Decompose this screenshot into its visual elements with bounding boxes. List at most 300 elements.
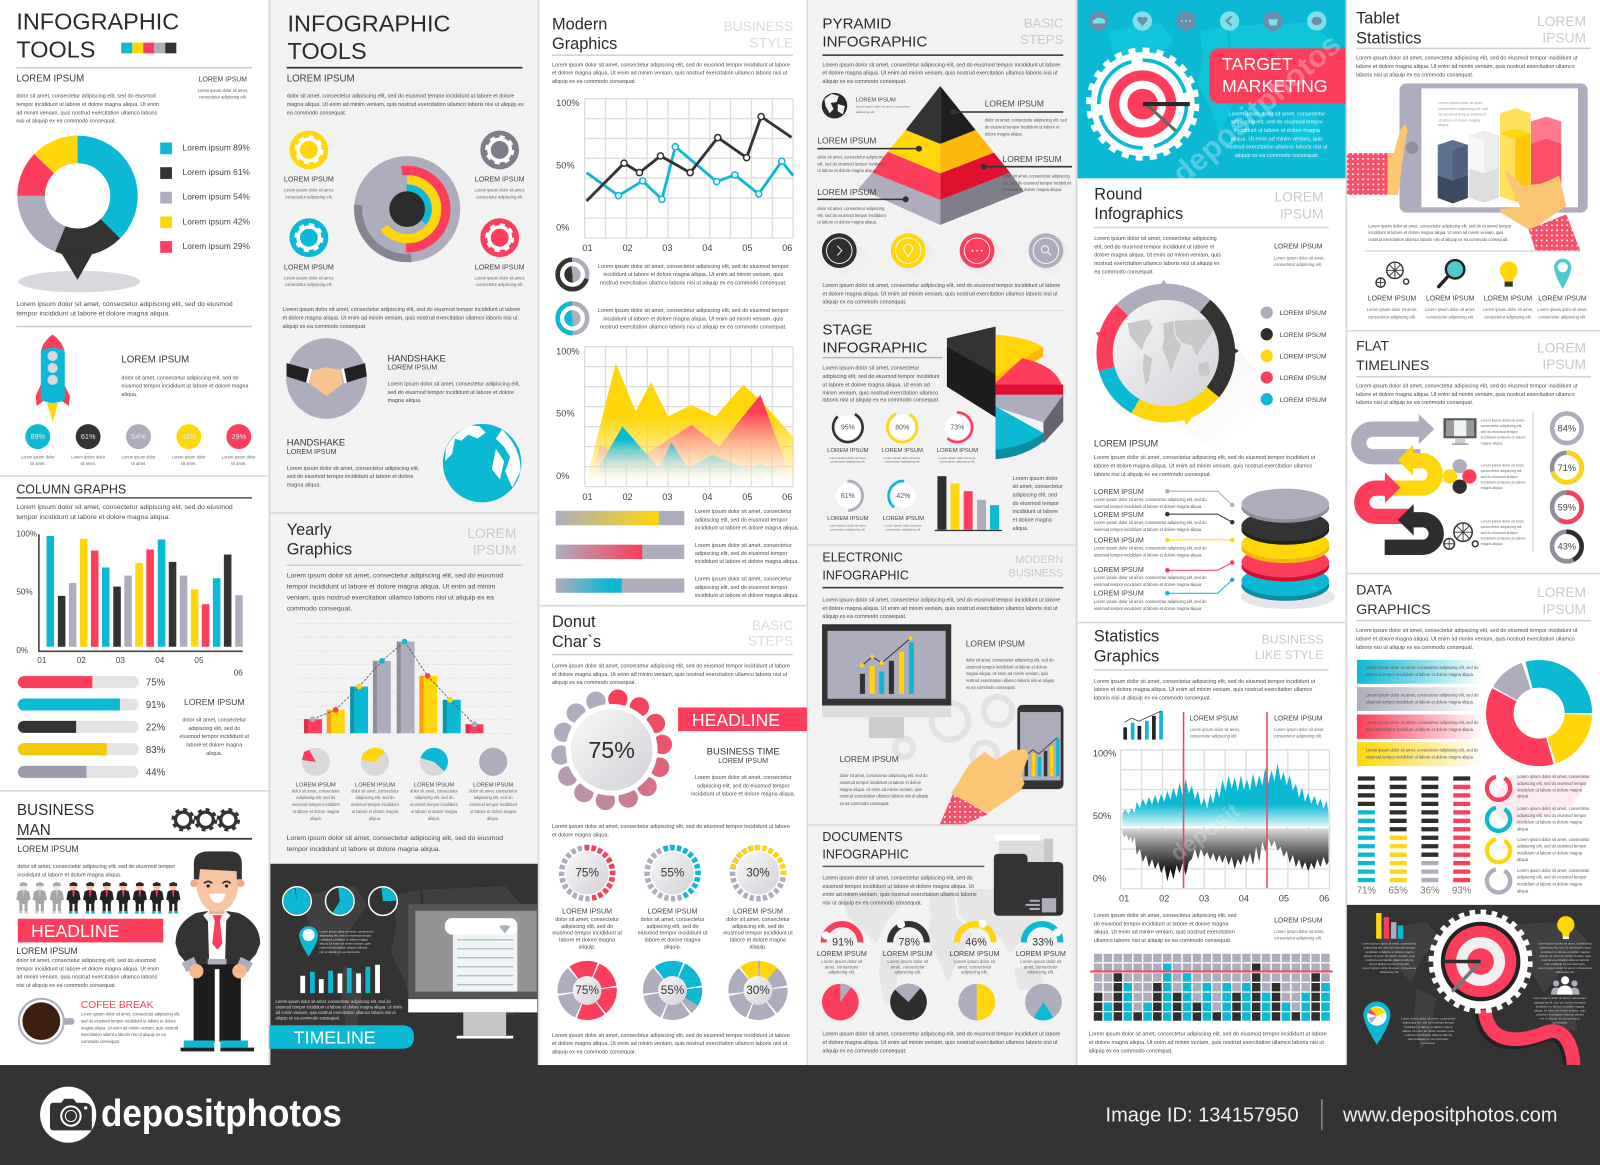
callout mid left: dolor sit amet, consectetur adipiscing bbox=[817, 154, 884, 159]
paragraph: aliquip ex ea commodo consequat. bbox=[552, 1049, 637, 1055]
text block: ad minim veniam, quis nostrud exercitation ullamco laboris bbox=[16, 975, 157, 981]
paragraph: et dolore magna aliqua. Ut enim ad minim veniam, quis nostrud exercitation ullamco laboris nisi ut bbox=[552, 1041, 788, 1047]
ring captions: adipiscing elit, sed do bbox=[732, 924, 784, 930]
paragraph: aliquip ex ea commodo consequat. bbox=[1089, 1048, 1173, 1054]
panel: dark target bbox=[1347, 905, 1600, 1068]
mini rings second row bbox=[833, 475, 924, 517]
ring captions: eiusmod tempor incididunt ut bbox=[638, 930, 708, 936]
mini rings first row bbox=[828, 407, 972, 447]
icon captions: LOREM IPSUM bbox=[1484, 296, 1532, 303]
paragraph: veniam, quis nostrud exercitation ullamco laboris nisi ut aliquip ex ea bbox=[287, 595, 494, 602]
paragraph: Lorem ipsum dolor sit amet, consectetur adipiscing elit, sed do eiusmod tempor incididunt ut bbox=[1356, 384, 1578, 390]
subheading: LOREM IPSUM bbox=[16, 73, 84, 84]
rocket caption: aliqua. bbox=[121, 392, 138, 398]
panel: electronic infographic bbox=[822, 551, 1063, 824]
dark panel text lower right: nostrud exercitation ullamco laboris bbox=[1536, 1013, 1584, 1017]
column chart: 02 bbox=[77, 656, 86, 665]
ring text: Lorem ipsum dolor sit amet, consectetur bbox=[1517, 806, 1590, 811]
business time text: incididunt ut labore et dolore magna aliqua. bbox=[691, 792, 796, 798]
side label: LOREM bbox=[1537, 14, 1586, 29]
dark panel text right: adipiscing elit, sed do eiusmod tempor bbox=[1539, 946, 1591, 950]
callout top right: dolore magna aliqua. bbox=[985, 131, 1023, 136]
mini ring captions: Lorem ipsum dolor sit amet, bbox=[883, 456, 921, 460]
paragraph: eiusmod tempor incididunt ut labore et dolore magna aliqua. Ut bbox=[822, 884, 974, 890]
heading: Tablet bbox=[1356, 9, 1400, 27]
ring text: aliqua. bbox=[1517, 826, 1529, 831]
second handshake text: sed do eiusmod tempor incididunt ut labore et dolore bbox=[287, 474, 413, 480]
column chart: 05 bbox=[194, 656, 204, 665]
bar descriptions: incididunt ut labore et dolore magna aliqua. bbox=[695, 559, 799, 565]
row text: Lorem ipsum dolor sit amet, consectetur adipiscing elit, sed do bbox=[1366, 720, 1479, 725]
waveform chart: 50% bbox=[1093, 811, 1111, 821]
gauge captions: LOREM IPSUM bbox=[883, 950, 933, 958]
red road bbox=[1482, 1010, 1573, 1068]
heading: Char`s bbox=[552, 633, 601, 651]
column chart: 0% bbox=[16, 646, 28, 655]
panel: target marketing bbox=[1078, 0, 1347, 191]
paragraph: et dolore magna aliqua. bbox=[552, 833, 609, 839]
watermark over target panel: depositphotos bbox=[1166, 27, 1347, 191]
bar descriptions: Lorem ipsum dolor sit amet, consectetur bbox=[695, 509, 792, 515]
mini rings second row: 42% bbox=[896, 493, 910, 500]
panel: modern graphics bbox=[552, 15, 799, 599]
target text: nostrud exercitation ullamco laboris nisi ut bbox=[1226, 145, 1328, 151]
icon captions: Lorem ipsum dolor sit amet, bbox=[1537, 307, 1588, 312]
ring text: Lorem ipsum dolor sit amet, consectetur bbox=[1517, 837, 1590, 842]
paragraph: Lorem ipsum dolor sit amet, consectetur adipiscing elit, sed do eiusmod tempor incididunt ut labore bbox=[552, 62, 790, 68]
heading: STAGE bbox=[822, 322, 873, 339]
heading: Graphics bbox=[552, 35, 617, 53]
pin text: Lorem ipsum dolor sit amet, consectetur bbox=[319, 929, 374, 933]
percentage circles: sit amet. bbox=[30, 461, 45, 466]
icon: coffee cup bbox=[18, 998, 74, 1045]
callout mid right bbox=[981, 154, 1072, 192]
petal dial 75% bbox=[551, 690, 672, 810]
second handshake text: Lorem ipsum dolor sit amet, consectetur adipiscing elit, bbox=[287, 466, 420, 472]
icon: map pin bbox=[1554, 259, 1571, 289]
pin text: adipiscing elit, sed do eiusmod tempor bbox=[319, 933, 371, 937]
dark panel text right: Lorem ipsum dolor sit amet, consectetur bbox=[1538, 966, 1592, 970]
column chart text: sit amet, consectetur bbox=[1013, 484, 1063, 490]
timeline text: sed do eiusmod tempor bbox=[1481, 475, 1519, 479]
background gears bbox=[895, 697, 1012, 767]
icon captions: consectetur adipiscing elit. bbox=[1484, 314, 1532, 319]
side note: dolor sit amet, consectetur bbox=[182, 718, 246, 724]
pie captions: aliqua. bbox=[369, 816, 381, 821]
panel: column graphs bbox=[16, 483, 252, 778]
mini ring captions: Lorem ipsum dolor sit amet, bbox=[939, 456, 976, 460]
percentage circles: Lorem ipsum dolor bbox=[172, 455, 206, 460]
area chart: 05 bbox=[742, 492, 752, 502]
ring captions: LOREM IPSUM bbox=[648, 908, 698, 916]
gear captions: Lorem ipsum dolor sit amet, bbox=[475, 187, 525, 192]
icon: rocket bbox=[36, 335, 70, 422]
side note: eiusmod tempor incididunt ut bbox=[180, 734, 250, 740]
column chart text: incididunt ut labore bbox=[1013, 509, 1058, 515]
legend: Lorem ipsum 61% bbox=[183, 167, 250, 177]
paragraph: Lorem ipsum dolor sit amet, consectetur adipiscing elit, sed do eiusmod tempor incididunt ut labore bbox=[822, 1032, 1060, 1038]
pie captions: aliqua. bbox=[428, 816, 440, 821]
dark panel text: ad minim veniam, quis nostrud exercitation ullamco laboris nisi ut bbox=[276, 1010, 396, 1015]
icon: three gears bbox=[173, 810, 239, 830]
illustration: tablet with 3D bars bbox=[1399, 83, 1588, 213]
paragraph: Lorem ipsum dolor sit amet, consectetur adipiscing elit, sed do eiusmod tempor incididunt ut labore bbox=[552, 1033, 790, 1039]
pie captions: eiusmod tempor incididunt bbox=[292, 802, 340, 807]
stripe columns bbox=[1366, 776, 1462, 882]
dark panel text right: aliqua. Ut enim ad minim veniam, quis bbox=[1539, 954, 1591, 958]
percentage circles: 29% bbox=[231, 432, 247, 441]
heading: GRAPHICS bbox=[1356, 602, 1431, 618]
tablet caption: incididunt ut labore et dolore magna aliqua. Ut enim ad minim veniam, quis bbox=[1368, 230, 1503, 235]
icon captions: LOREM IPSUM bbox=[1426, 296, 1475, 303]
icon: mini monitor bbox=[1443, 418, 1477, 445]
bar descriptions: incididunt ut labore et dolore magna aliqua. bbox=[695, 525, 799, 531]
pie captions: dolor sit amet, consectetur bbox=[292, 788, 340, 793]
button icons bbox=[822, 233, 1076, 286]
side note: labore et dolore magna bbox=[186, 743, 243, 749]
ring captions: adipiscing elit, sed do bbox=[647, 924, 699, 930]
people row bbox=[16, 882, 180, 914]
column chart: 100% bbox=[16, 530, 37, 539]
dark panel text right: incididunt ut labore et dolore magna bbox=[1541, 950, 1590, 954]
monitor text: eiusmod tempor incididunt ut labore et dolore bbox=[966, 664, 1048, 669]
legend bbox=[160, 142, 250, 253]
annotation text: Lorem ipsum dolor sit amet, bbox=[1274, 727, 1324, 732]
gear captions: LOREM IPSUM bbox=[284, 176, 334, 184]
stack list: eiusmod tempor incididunt ut labore et dolore magna aliqua. bbox=[1094, 582, 1202, 587]
side note: Lorem ipsum dolor sit amet, bbox=[1274, 929, 1324, 934]
illustration: tablet with 3D bars: do eiusmod tempor incididunt bbox=[1438, 113, 1486, 117]
side note: LOREM IPSUM bbox=[184, 697, 245, 707]
stack list: eiusmod tempor incididunt ut labore et dolore magna aliqua. bbox=[1094, 527, 1202, 532]
cyan ring bbox=[558, 303, 587, 333]
illustration: monitor with document bbox=[408, 904, 537, 1039]
gauge captions: amet, consectetur bbox=[825, 964, 859, 969]
icon: yellow bulb bbox=[1557, 916, 1574, 939]
icon: gears bbox=[1444, 523, 1478, 549]
round ring chart bbox=[1096, 280, 1276, 449]
semi gauges: 91% bbox=[832, 936, 854, 948]
small pies bbox=[302, 748, 507, 776]
column chart: 50% bbox=[16, 588, 33, 597]
icon captions: consectetur adipiscing elit. bbox=[1368, 314, 1416, 319]
dark panel text right: Lorem ipsum dolor sit amet, consectetur bbox=[1538, 942, 1592, 946]
illustration: pointing hand bbox=[940, 750, 1029, 824]
panel: infographic tools, gears and handshake bbox=[282, 11, 525, 502]
paragraph: laboris nisi ut aliquip ex ea commodo consequat. bbox=[1094, 696, 1212, 702]
ring text: nostrud exercitation ullamco laboris nisi ut aliquip ex ea commodo consequat. bbox=[600, 324, 787, 330]
paragraph: tempor incididunt ut labore et dolore magna aliqua. bbox=[16, 514, 170, 521]
handshake text: sed do eiusmod tempor incididunt ut labore et dolore bbox=[387, 390, 514, 396]
mini rings second row: 61% bbox=[841, 493, 855, 500]
pie captions: aliqua. bbox=[310, 816, 322, 821]
stack list: Lorem ipsum dolor sit amet, consectetur adipiscing elit, sed do bbox=[1094, 497, 1207, 502]
paragraph: aliquip ex ea commodo consequat. bbox=[822, 79, 907, 85]
image id: Image ID: 134157950 bbox=[1106, 1104, 1299, 1126]
dark panel text lower right: adipiscing elit, sed do eiusmod tempor bbox=[1534, 1000, 1586, 1004]
illustration: tablet with 3D bars: consectetur adipiscing elit, sed bbox=[1438, 107, 1488, 111]
globe caption: adipiscing elit. bbox=[856, 110, 875, 114]
paragraph: aliquip ex ea commodo consequat. bbox=[282, 324, 367, 330]
paragraph: tempor incididunt ut labore et dolore magna aliqua. bbox=[16, 311, 170, 318]
waveform chart: 04 bbox=[1239, 893, 1249, 903]
illustration: right hand pointing bbox=[1500, 171, 1580, 251]
percentage circles: sit amet. bbox=[231, 461, 246, 466]
ring legend: LOREM IPSUM bbox=[1280, 332, 1327, 339]
text block: Lorem ipsum dolor sit amet, consectetur adipiscing elit, sed do eiusmod tempor incididunt ut bbox=[1094, 455, 1316, 461]
side note: Lorem ipsum dolor sit amet, bbox=[1274, 255, 1324, 260]
column chart text: Lorem ipsum dolor bbox=[1013, 476, 1058, 482]
pie captions: eiusmod tempor incididunt bbox=[351, 802, 400, 807]
illustration: tablet with 3D bars: Lorem ipsum dolor sit amet, bbox=[1438, 101, 1483, 105]
dashed ring 55%: 55% bbox=[661, 866, 684, 879]
pie captions: ut labore et dolore magna bbox=[352, 809, 399, 814]
mini ring captions: LOREM IPSUM bbox=[827, 448, 869, 454]
paragraph: Lorem ipsum dolor sit amet, consectetur adipiscing elit, sed do eiusmod tempor incididunt ut labore bbox=[1089, 1032, 1327, 1038]
intro text: ea commodo consequat. bbox=[287, 110, 347, 116]
icon: mini growth chart bbox=[1123, 711, 1163, 740]
icon: grey gear bbox=[480, 131, 519, 169]
panel: round infographics bbox=[1094, 185, 1335, 611]
headline banner: HEADLINE bbox=[31, 921, 119, 941]
callout top right: dolor sit amet, consectetur adipiscing elit, sed bbox=[985, 117, 1067, 122]
pie captions: LOREM IPSUM bbox=[296, 783, 336, 789]
percentage circles: sit amet. bbox=[80, 461, 96, 466]
ring text: incididunt ut labore et dolore magna bbox=[1517, 820, 1583, 825]
dark panel text bottom: consequat. bbox=[1421, 1041, 1436, 1045]
paragraph: Lorem ipsum dolor sit amet, consectetur adipiscing elit, sed do eiusmod bbox=[16, 504, 233, 511]
panel: documents infographic bbox=[817, 830, 1066, 1054]
waveform chart bbox=[1093, 712, 1330, 903]
paragraph: Lorem ipsum dolor sit amet, consectetur adipiscing elit, sed do eiusmod tempor incididunt ut labore bbox=[822, 62, 1060, 68]
stack list: LOREM IPSUM bbox=[1094, 537, 1144, 545]
black ring bbox=[558, 260, 587, 289]
ring text: adipiscing elit, sed do eiusmod tempor bbox=[1517, 844, 1587, 849]
line chart: 50% bbox=[556, 160, 574, 170]
waveform chart: 100% bbox=[1093, 749, 1116, 759]
paragraph: Lorem ipsum dolor sit amet, consectetur adipiscing elit, sed do eiusmod tempor incididunt ut labore bbox=[282, 307, 520, 313]
gear captions: consectetur adipiscing elit. bbox=[476, 194, 524, 199]
column chart text: aliqua. bbox=[1013, 526, 1029, 532]
column chart: 01 bbox=[37, 656, 47, 665]
globe caption: Lorem ipsum dolor sit amet, consectetur bbox=[856, 105, 910, 109]
area chart: 06 bbox=[782, 492, 792, 502]
side label: MODERN bbox=[1015, 554, 1063, 566]
paragraph: Lorem ipsum dolor sit amet, consectetur adipiscing elit, sed do eiusmod bbox=[287, 572, 503, 579]
line chart: 0% bbox=[556, 223, 569, 233]
gauge captions: adipiscing elit. bbox=[1027, 970, 1054, 975]
pie charts bbox=[822, 984, 1062, 1020]
icon captions: consectetur adipiscing elit. bbox=[1426, 314, 1474, 319]
panel: yearly graphics bbox=[287, 521, 522, 853]
gear captions: consectetur adipiscing elit. bbox=[285, 282, 333, 287]
ring icons bbox=[1483, 772, 1514, 897]
mini rings first row: 80% bbox=[895, 425, 909, 432]
paragraph: labore et dolore magna aliqua. Ut enim ad minim veniam, quis nostrud exercitation ullamco bbox=[1094, 687, 1312, 693]
arrow timeline: grey bbox=[1359, 414, 1434, 457]
paragraph: enim ad minim veniam, quis nostrud exercitation ullamco laboris bbox=[822, 892, 977, 898]
stacked discs bbox=[1241, 489, 1335, 609]
gauge captions: LOREM IPSUM bbox=[950, 950, 999, 958]
stripe values: 36% bbox=[1420, 886, 1440, 897]
gauge captions: Lorem ipsum dolor sit bbox=[887, 959, 929, 964]
side label: LOREM bbox=[1537, 341, 1586, 356]
ring captions: dolor sit amet, consectetur bbox=[641, 917, 705, 923]
icon captions: consectetur adipiscing elit. bbox=[1539, 314, 1586, 319]
line chart: 01 bbox=[582, 243, 593, 253]
callout bottom left: elit, sed do eiusmod tempor incididunt bbox=[817, 213, 887, 218]
monitor text: magna aliqua. Ut enim ad minim veniam, quis bbox=[966, 671, 1048, 676]
side label: IPSUM bbox=[1542, 31, 1586, 46]
title: INFOGRAPHIC bbox=[288, 11, 451, 37]
stack list: LOREM IPSUM bbox=[1094, 488, 1144, 496]
segmented donut 75% bbox=[557, 960, 618, 1021]
side label: BUSINESS bbox=[1009, 567, 1063, 579]
row text: eiusmod tempor incididunt ut labore et dolore magna aliqua. bbox=[1366, 754, 1474, 759]
footer bar bbox=[0, 1065, 1600, 1165]
gear captions: Lorem ipsum dolor sit amet, bbox=[475, 275, 525, 280]
paragraph: et dolore magna aliqua. Ut enim ad minim veniam, quis nostrud exercitation ullamco laboris nisi ut bbox=[282, 316, 518, 322]
side label: STEPS bbox=[1020, 32, 1064, 47]
radial chart bbox=[354, 156, 460, 262]
paragraph: laboris nisi ut aliquip ex ea commodo consequat. bbox=[1356, 400, 1474, 406]
website: www.depositphotos.com bbox=[1342, 1104, 1557, 1126]
line chart: 02 bbox=[622, 243, 633, 253]
text block: laboris nisi ut aliquip ex ea commodo consequat. bbox=[1094, 472, 1212, 478]
monitor text: nostrud exercitation ullamco laboris nisi ut aliquip bbox=[966, 678, 1055, 683]
pin text: aliqua. Ut enim ad minim veniam, quis bbox=[319, 942, 371, 946]
gauge captions: amet, consectetur bbox=[958, 964, 992, 969]
side note: consectetur adipiscing elit. bbox=[1274, 935, 1322, 940]
intro text: ad minim veniam, quis nostrud exercitation ullamco laboris bbox=[16, 110, 157, 116]
paragraph: tempor incididunt ut labore et dolore magna aliqua. Ut enim ad minim bbox=[287, 584, 496, 591]
subheading: LOREM IPSUM bbox=[17, 844, 79, 854]
heading: Yearly bbox=[287, 521, 332, 539]
side label: STEPS bbox=[748, 634, 793, 649]
ring text: incididunt ut labore et dolore magna bbox=[1517, 850, 1583, 855]
panel: statistics graphics bbox=[1089, 628, 1333, 1054]
gauge captions: amet, consectetur bbox=[891, 964, 925, 969]
gauge captions: adipiscing elit. bbox=[894, 970, 921, 975]
icon: red gear bbox=[480, 218, 519, 257]
paragraph: et dolore magna aliqua. Ut enim ad minim veniam, quis nostrud exercitation ullamco laboris nisi ut bbox=[822, 291, 1058, 297]
target text: adipiscing elit, sed do eiusmod tempor bbox=[1231, 120, 1323, 126]
gear captions: consectetur adipiscing elit. bbox=[476, 282, 524, 287]
side note: adipiscing elit, sed do bbox=[188, 726, 240, 732]
bar and line chart bbox=[294, 623, 516, 733]
paragraph: ea commodo consequat. bbox=[1094, 269, 1154, 275]
bar descriptions: Lorem ipsum dolor sit amet, consectetur bbox=[695, 576, 792, 582]
paragraph: et dolore magna aliqua. Ut enim ad minim veniam, quis nostrud exercitation ullamco laboris nisi ut bbox=[822, 606, 1058, 612]
headline banner bbox=[18, 919, 163, 942]
side note: LOREM IPSUM bbox=[1274, 917, 1323, 924]
column chart bbox=[16, 530, 243, 677]
paragraph: aliquip ex ea commodo consequat. bbox=[822, 1048, 907, 1054]
pie captions: ut labore et dolore magna bbox=[411, 809, 458, 814]
ring text: incididunt ut labore et dolore magna aliqua. Ut enim ad minim veniam, quis bbox=[603, 316, 783, 322]
text block: labore et dolore magna aliqua. Ut enim ad minim veniam, quis nostrud exercitation ullamco bbox=[1094, 464, 1312, 470]
panel backgrounds: grey columns bbox=[270, 0, 1076, 1065]
mini ring captions: LOREM IPSUM bbox=[882, 448, 923, 454]
paragraph: et dolore magna aliqua. Ut enim ad minim veniam, quis nostrud exercitation ullamco laboris nisi ut bbox=[1089, 1040, 1324, 1046]
mini ring captions: LOREM IPSUM bbox=[937, 448, 978, 454]
intro text: magna aliqua. Ut enim ad minim veniam, quis nostrud exercitation ullamco laboris nisi ut aliquip ex bbox=[287, 102, 524, 108]
paragraph: labore et dolore magna aliqua. Ut enim ad minim veniam, quis nostrud exercitation ullamco bbox=[1356, 392, 1575, 398]
timeline text: incididunt ut labore et dolore bbox=[1481, 481, 1525, 485]
percentage circles: Lorem ipsum dolor bbox=[122, 455, 156, 460]
subheading: LOREM IPSUM bbox=[287, 73, 355, 84]
semi gauges: 33% bbox=[1032, 936, 1054, 948]
petal dial 75%: 75% bbox=[588, 737, 635, 763]
illustration: tablet with 3D bars: ut labore et dolore magna bbox=[1438, 119, 1481, 123]
icon captions: Lorem ipsum dolor sit amet, bbox=[1367, 307, 1417, 312]
percentage circles: 54% bbox=[131, 432, 146, 441]
title: TOOLS bbox=[16, 36, 95, 62]
target marketing banner bbox=[1209, 48, 1346, 103]
heat grid chart bbox=[1090, 954, 1333, 1021]
area chart: 01 bbox=[582, 492, 593, 502]
percentage circles: Lorem ipsum dolor bbox=[21, 455, 55, 460]
panel: stage infographic bbox=[822, 322, 1063, 532]
ring text: adipiscing elit, sed do eiusmod tempor bbox=[1517, 875, 1587, 880]
mini rings first row: 95% bbox=[841, 425, 855, 432]
paragraph: Lorem ipsum dolor sit amet, consectetur bbox=[822, 366, 919, 372]
dark panel text right: adipiscing elit. bbox=[1556, 970, 1575, 974]
paragraph: aliquip ex ea commodo consequat. bbox=[822, 614, 907, 620]
intro text: incididunt ut labore et dolore magna aliqua. bbox=[17, 872, 122, 878]
ring captions: aliquip. bbox=[664, 944, 682, 950]
mini colour bars bbox=[1376, 913, 1403, 939]
timeline text: incididunt ut labore et dolore bbox=[1481, 537, 1525, 541]
percentage circles: 61% bbox=[81, 432, 96, 441]
paragraph: Lorem ipsum dolor sit amet, consectetur adipiscing elit, sed do eiusmod tempor incididunt ut labore bbox=[822, 283, 1060, 289]
paragraph: Lorem ipsum dolor sit amet, consectetur adipiscing elit, sed do bbox=[822, 875, 973, 881]
arrow timeline: black bbox=[1385, 504, 1436, 547]
stripe values: 93% bbox=[1452, 886, 1472, 897]
heading: COLUMN GRAPHS bbox=[16, 483, 126, 497]
callout mid left: elit, sed do eiusmod tempor incididunt bbox=[817, 161, 887, 166]
icon: map pin bbox=[299, 926, 318, 956]
monitor text: dolor sit amet, consectetur adipiscing elit, sed do bbox=[966, 658, 1054, 663]
gradient rows bbox=[1357, 660, 1484, 766]
gauge captions: adipiscing elit. bbox=[961, 970, 988, 975]
column chart text: et dolore magna bbox=[1013, 517, 1053, 523]
mini ring captions: Lorem ipsum dolor sit amet, bbox=[885, 523, 922, 527]
timeline text: Lorem ipsum dolor sit amet, bbox=[1481, 520, 1525, 524]
mini ring captions: consectetur adipiscing elit. bbox=[830, 527, 866, 531]
timeline banner bbox=[269, 1025, 414, 1049]
percentage rings: 43% bbox=[1558, 542, 1576, 552]
area chart: 02 bbox=[622, 492, 633, 502]
heading: ELECTRONIC bbox=[822, 551, 903, 565]
panel: timeline dark bbox=[269, 864, 538, 1065]
side note: LOREM IPSUM bbox=[1274, 244, 1323, 251]
ring text: nostrud exercitation ullamco laboris nisi ut aliquip ex ea commodo consequat. bbox=[600, 281, 787, 287]
legend: Lorem ipsum 42% bbox=[183, 216, 250, 226]
headline banner bbox=[678, 707, 807, 731]
timeline text: sed do eiusmod tempor bbox=[1481, 531, 1519, 535]
lower text: ex ea commodo consequat. bbox=[840, 801, 890, 806]
icon: cyan gear bbox=[289, 218, 328, 257]
gauge captions: amet, consectetur bbox=[1024, 964, 1058, 969]
icon: handshake bbox=[286, 338, 367, 419]
panel: business man bbox=[16, 802, 260, 1051]
bar descriptions: adipiscing elit, sed do eiusmod tempor bbox=[695, 585, 788, 591]
callout mid left bbox=[817, 135, 922, 173]
ring legend: LOREM IPSUM bbox=[1280, 375, 1327, 382]
progress bars: 44% bbox=[146, 767, 166, 778]
progress bars bbox=[18, 676, 166, 778]
